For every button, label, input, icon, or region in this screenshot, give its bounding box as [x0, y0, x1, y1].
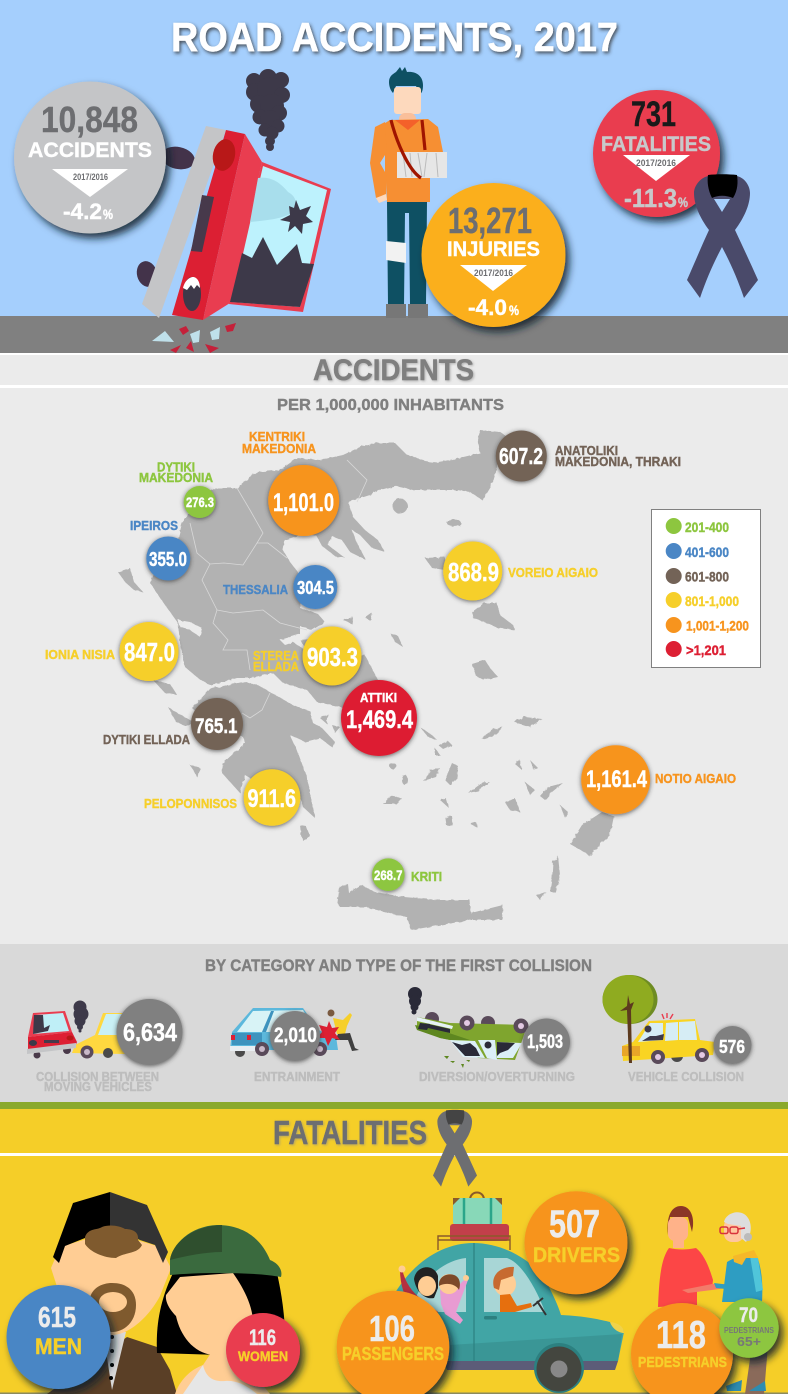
legend: 601-800	[685, 568, 729, 584]
panel: accidents stat: 2017/2016	[73, 172, 108, 182]
bubble: Anatoliki Makedonia, Thraki: MAKEDONIA, THRAKI	[555, 454, 681, 469]
panel: accidents stat: ACCIDENTS	[28, 139, 152, 162]
panel: fatalities stat: -11.3	[624, 183, 677, 213]
bubble: Kriti: 268.7	[374, 867, 403, 883]
icon: grey ribbon	[433, 1110, 477, 1187]
panel: passengers: 106	[369, 1308, 415, 1349]
background: sky	[0, 0, 788, 316]
bubble: Sterea Ellada: ELLADA	[253, 659, 300, 674]
bubble: Thessalia: 304.5	[297, 578, 334, 598]
category: collision between moving vehicles	[27, 999, 182, 1094]
category: vehicle collision	[602, 975, 752, 1084]
bubble: Thessalia	[223, 565, 337, 609]
icon: car hitting pedestrian	[230, 1008, 359, 1057]
bubble: Sterea Ellada: STEREA	[253, 648, 300, 663]
panel: fatalities stat	[593, 90, 720, 217]
panel: fatalities stat: FATALITIES	[601, 133, 711, 156]
bubble: Notio Aigaio: NOTIO AIGAIO	[655, 771, 736, 786]
icon: driver	[493, 1267, 546, 1315]
bubble: Attiki: ATTIKI	[360, 690, 397, 705]
bubble: Attiki: 1,469.4	[346, 706, 413, 734]
bubble: Anatoliki Makedonia, Thraki: ANATOLIKI	[555, 443, 618, 458]
bubble: Dytiki Makedonia: 276.3	[186, 494, 214, 510]
icon: car against tree	[602, 975, 715, 1064]
illustration: pedestrians	[658, 1206, 768, 1394]
bubble: Ionia Nisia: IONIA NISIA	[45, 647, 116, 662]
bubble: Dytiki Makedonia	[139, 460, 216, 518]
bubble: Voreio Aigaio: 868.9	[448, 557, 499, 587]
category: entrainment: ENTRAINMENT	[254, 1070, 340, 1084]
panel: women	[226, 1313, 300, 1387]
panel: passengers	[337, 1291, 449, 1394]
bubble: Kriti: KRITI	[411, 869, 442, 884]
illustration: debris on road	[152, 323, 236, 353]
bubble: Anatoliki Makedonia, Thraki: 607.2	[499, 443, 543, 469]
heading: accidents: ACCIDENTS	[313, 354, 474, 387]
map of Greece	[118, 430, 614, 930]
panel: pedestrians: 118	[656, 1314, 706, 1357]
panel: fatalities stat: 731	[631, 95, 676, 134]
bubble: Kriti	[372, 858, 442, 891]
panel: pedestrians: PEDESTRIANS	[638, 1354, 727, 1371]
category: diversion overturning	[408, 987, 575, 1084]
panel: drivers	[524, 1191, 628, 1294]
category: diversion overturning: DIVERSION/OVERTURNING	[419, 1070, 575, 1084]
panel: women: WOMEN	[238, 1348, 288, 1364]
panel: injuries stat: 13,271	[448, 200, 532, 241]
category: entrainment: 2,010	[274, 1024, 317, 1047]
icon: dark ribbon	[687, 174, 758, 298]
panel: pedestrians over 65: 65+	[737, 1334, 761, 1349]
icon: colliding cars	[27, 1000, 125, 1058]
icon: luggage	[438, 1192, 510, 1250]
illustration: family car	[395, 1192, 624, 1393]
panel: injuries stat: 2017/2016	[474, 268, 513, 278]
bubble: Notio Aigaio	[581, 745, 736, 814]
legend: 801-1,000	[685, 593, 739, 609]
category: diversion overturning: 1,503	[527, 1032, 563, 1053]
panel: drivers: DRIVERS	[533, 1244, 620, 1267]
category: collision between moving vehicles: COLLISION BETWEEN	[36, 1070, 159, 1084]
heading: per million inhabitants: PER 1,000,000 INHABITANTS	[277, 397, 504, 414]
panel: women: 116	[249, 1325, 276, 1350]
bubble: Ionia Nisia: 847.0	[124, 637, 175, 667]
category: vehicle collision: 576	[719, 1037, 745, 1057]
background: fatalities panel	[0, 1109, 788, 1394]
panel: injuries stat: -4.0	[468, 295, 507, 320]
panel: men	[6, 1285, 110, 1389]
title: ROAD ACCIDENTS, 2017	[171, 14, 618, 60]
panel: fatalities stat: 2017/2016	[636, 158, 676, 168]
panel: drivers: 507	[549, 1203, 600, 1246]
background: accidents header band	[0, 353, 788, 388]
icon: smoke	[246, 69, 290, 151]
background: road	[0, 316, 788, 353]
illustration: man with beard	[47, 1192, 177, 1394]
legend	[652, 510, 760, 668]
bubble: Attiki	[341, 680, 417, 756]
illustration: overturned red car	[134, 69, 331, 320]
icon: overturned green car	[408, 987, 528, 1068]
panel: accidents stat: 10,848	[41, 99, 138, 140]
heading: by category: BY CATEGORY AND TYPE OF THE FIRST COLLISION	[205, 956, 592, 975]
panel: injuries stat: INJURIES	[447, 238, 540, 261]
chart: regional values	[45, 429, 736, 891]
illustration: woman with hat	[157, 1225, 285, 1394]
legend: >1,201	[686, 642, 726, 658]
bubble: Peloponnisos	[144, 769, 300, 826]
bubble: Dytiki Ellada	[103, 698, 243, 750]
category: collision between moving vehicles: 6,634	[123, 1019, 177, 1047]
panel: men: 615	[38, 1302, 76, 1334]
bubble: Dytiki Makedonia: DYTIKI	[157, 460, 195, 474]
bubble: Dytiki Makedonia: MAKEDONIA	[139, 470, 214, 485]
bubble: Thessalia: THESSALIA	[223, 582, 289, 597]
panel: accidents stat	[14, 82, 166, 234]
bubble: Notio Aigaio: 1,161.4	[586, 766, 647, 793]
category: collision between moving vehicles: MOVING VEHICLES	[44, 1080, 152, 1094]
legend: 201-400	[685, 519, 729, 535]
icon: wheel	[534, 1343, 584, 1393]
background: map panel	[0, 388, 788, 944]
legend: 1,001-1,200	[686, 618, 749, 634]
bubble: Peloponnisos: PELOPONNISOS	[144, 796, 237, 811]
bubble: Kentriki Makedonia: MAKEDONIA	[242, 441, 317, 456]
panel: men: MEN	[35, 1334, 82, 1359]
panel: pedestrians over 65	[719, 1298, 779, 1358]
bubble: Kentriki Makedonia: 1,101.0	[273, 489, 334, 517]
category: vehicle collision: VEHICLE COLLISION	[628, 1070, 744, 1084]
bubble: Peloponnisos: 911.6	[248, 785, 296, 813]
bubble: Sterea Ellada: 903.3	[307, 642, 358, 672]
bubble: Voreio Aigaio: VOREIO AIGAIO	[508, 565, 598, 580]
bubble: Anatoliki Makedonia, Thraki	[496, 430, 681, 482]
bubble: Ipeiros: IPEIROS	[130, 518, 178, 533]
bubble: Voreio Aigaio	[443, 542, 598, 600]
illustration: injured man	[370, 67, 447, 318]
bubble: Kentriki Makedonia	[242, 429, 339, 536]
bubble: Ipeiros: 355.0	[149, 549, 187, 571]
bubble: Sterea Ellada	[253, 626, 362, 686]
panel: injuries stat: %	[509, 302, 519, 318]
bubble: Dytiki Ellada: DYTIKI ELLADA	[103, 732, 191, 747]
panel: injuries stat	[422, 183, 566, 327]
bubble: Ionia Nisia	[45, 622, 178, 681]
background: category panel	[0, 944, 788, 1102]
panel: pedestrians over 65: 70	[739, 1304, 758, 1327]
background: green divider	[0, 1102, 788, 1109]
panel: pedestrians	[631, 1303, 733, 1394]
panel: accidents stat: -4.2	[63, 199, 102, 224]
bubble: Ipeiros	[130, 518, 190, 580]
icon: passengers	[398, 1266, 469, 1324]
bubble: Dytiki Ellada: 765.1	[195, 715, 238, 738]
heading: fatalities: FATALITIES	[273, 1114, 427, 1151]
panel: fatalities stat: %	[678, 194, 688, 210]
category: entrainment	[230, 1008, 359, 1084]
panel: pedestrians over 65: PEDESTRIANS	[724, 1326, 775, 1335]
bubble: Kentriki Makedonia: KENTRIKI	[249, 429, 305, 444]
panel: passengers: PASSENGERS	[342, 1344, 444, 1364]
legend: 401-600	[685, 544, 729, 560]
panel: accidents stat: %	[103, 206, 113, 222]
